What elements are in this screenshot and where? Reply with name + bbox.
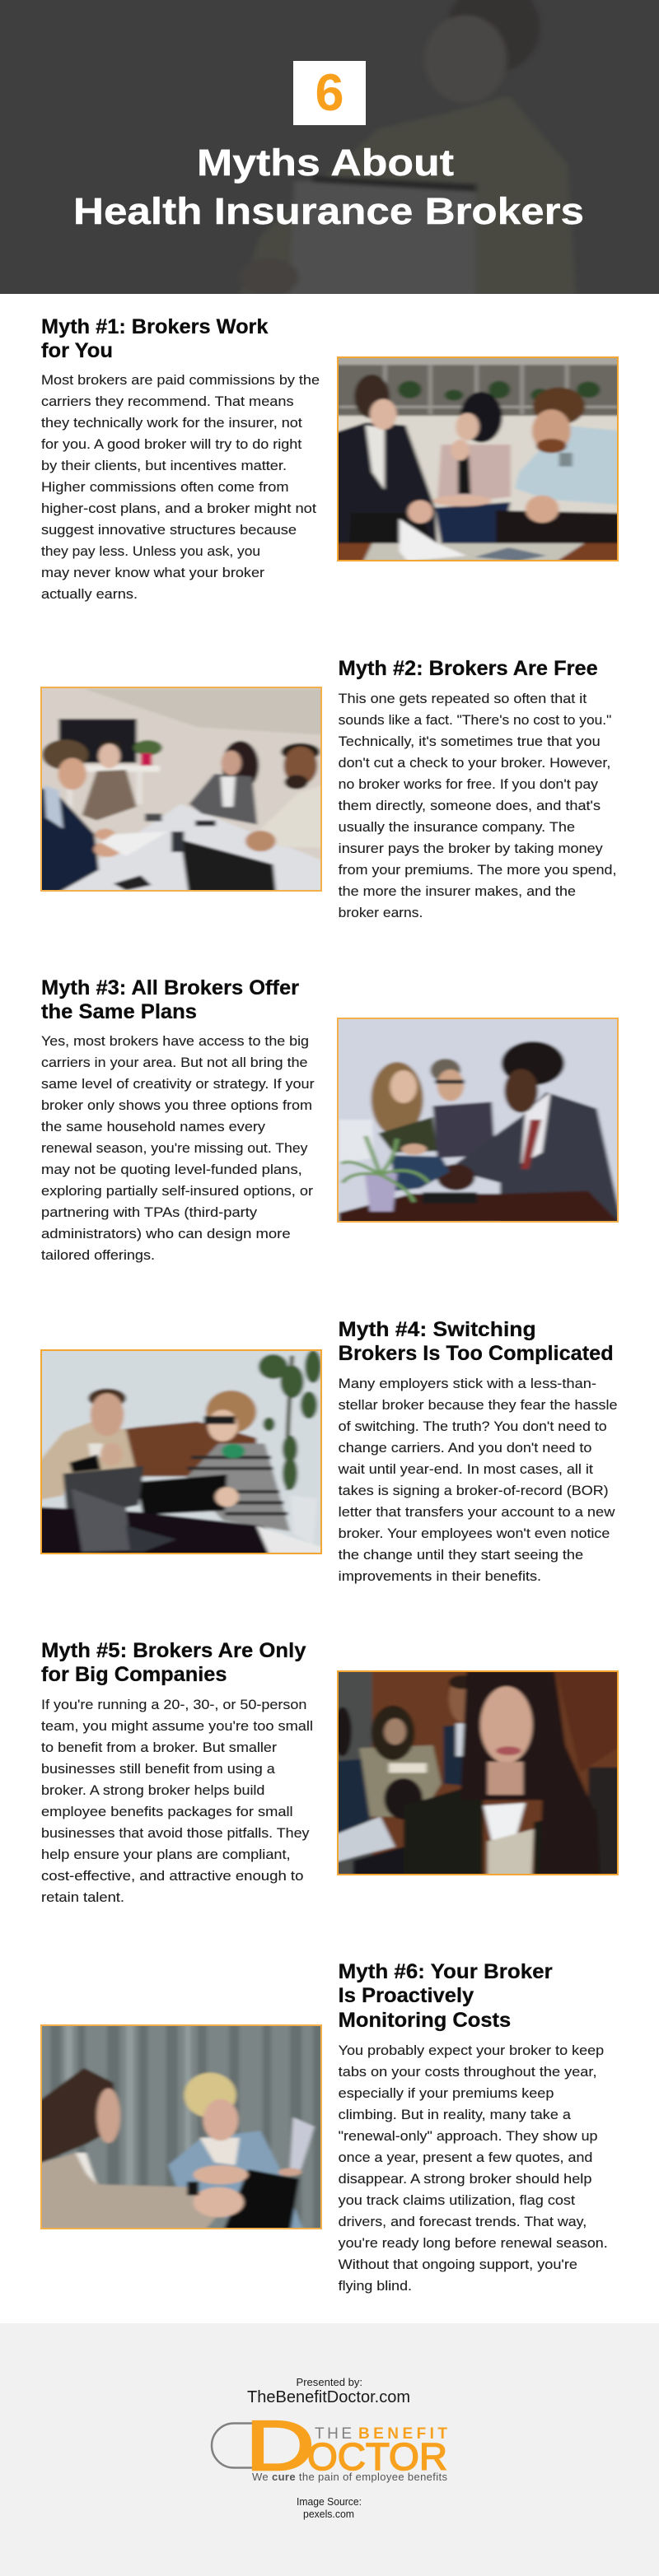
body text: myth 1: by their clients, but incentives matter. (41, 459, 287, 473)
body text: myth 5: cost-effective, and attractive enough to (41, 1869, 303, 1884)
man right (262, 787, 320, 847)
body text: myth 4 (338, 1377, 618, 1584)
photo: four people around a table (40, 687, 322, 892)
title: Myths About (197, 142, 454, 184)
body text: myth 6: You probably expect your broker to keep (339, 2043, 604, 2058)
body text: myth 2: don't cut a check to your broker. However, (339, 756, 610, 771)
brunette woman (34, 2153, 221, 2234)
photo border (338, 1018, 618, 1222)
body text: myth 3: the same household names every (41, 1120, 266, 1134)
photo border (41, 2025, 321, 2229)
footer (0, 2323, 659, 2576)
body text: myth 4: Many employers stick with a less-than- (339, 1377, 596, 1391)
title: Health Insurance Brokers (73, 190, 584, 232)
heading: myth 1: Myth #1: Brokers Work (41, 315, 269, 338)
body text: myth 3: Yes, most brokers have access to the big (41, 1034, 309, 1049)
body text: myth 5 (41, 1698, 313, 1905)
photo border (338, 357, 618, 561)
body text: myth 1: Most brokers are paid commissions by the (41, 373, 320, 388)
body text: myth 6 (339, 2043, 608, 2294)
body text: myth 4: broker. Your employees won't even notice (339, 1526, 610, 1541)
hands (194, 2165, 248, 2184)
body text: myth 4: takes is signing a broker-of-record (BOR) (339, 1484, 609, 1498)
body text: myth 1: for you. A good broker will try to do right (41, 437, 302, 452)
body text: myth 6: tabs on your costs throughout the year, (339, 2065, 596, 2080)
sofa woman left (332, 422, 437, 545)
paper (290, 2117, 315, 2175)
body text: myth 4: wait until year-end. In most cases, all it (338, 1462, 593, 1477)
body text: myth 3: partnering with TPAs (third-party (41, 1205, 258, 1220)
body text: myth 1: they pay less. Unless you ask, you (41, 544, 260, 559)
panel: myth 3 (41, 976, 630, 1263)
man (34, 1422, 137, 1501)
man with glasses (433, 1102, 495, 1158)
sofa woman middle (437, 445, 511, 505)
sofa man right (494, 509, 617, 545)
heading: myth 4: Brokers Is Too Complicated (339, 1342, 614, 1365)
body text: myth 1: Higher commissions often come from (41, 480, 288, 495)
body text: myth 4: change carriers. And you don't need to (339, 1441, 591, 1456)
body text: myth 5: employee benefits packages for small (41, 1805, 293, 1819)
body text: myth 1: carriers they recommend. That means (41, 394, 294, 409)
book and laptops (137, 1474, 227, 1515)
heading: myth 1: for You (41, 339, 113, 362)
photo: smiling woman in a group (337, 1670, 619, 1875)
body text: myth 6: disappear. A strong broker should help (339, 2172, 591, 2187)
body text: myth 1: they technically work for the insurer, not (41, 416, 302, 431)
logo big D: D (245, 2407, 315, 2485)
body text: myth 3: same level of creativity or strategy. If your (41, 1077, 315, 1092)
body text: myth 1: may never know what your broker (41, 566, 265, 580)
background people (359, 1745, 442, 1817)
body text: myth 6: you track claims utilization, flag cost (339, 2193, 575, 2208)
body text: myth 4: of switching. The truth? You don't need to (339, 1419, 607, 1434)
body text: myth 6: especially if your premiums keep (339, 2086, 554, 2101)
body text: myth 1: actually earns. (41, 587, 138, 602)
logo: The Benefit Doctor (212, 2407, 448, 2485)
image source: Image Source: (297, 2495, 362, 2508)
heading: myth 3: the Same Plans (41, 1000, 197, 1023)
panel: myth 4 (30, 1318, 618, 1584)
tablet and notebook (390, 1155, 450, 1191)
photo: adviser with a couple (337, 1018, 619, 1223)
body text: myth 6: you're ready long before renewal season. (339, 2236, 608, 2251)
logo pill outline (212, 2424, 252, 2468)
body text: myth 6: climbing. But in reality, many take a (339, 2108, 572, 2122)
body text: myth 2: sounds like a fact. "There's no cost to you." (339, 713, 611, 728)
heading: myth 5 (41, 1639, 306, 1686)
body text: myth 3: renewal season, you're missing out. They (41, 1141, 308, 1156)
body text: myth 2: Technically, it's sometimes true that you (339, 734, 601, 749)
body text: myth 2: This one gets repeated so often that it (339, 692, 587, 706)
image source (297, 2495, 362, 2520)
panel: myth 5 (41, 1639, 630, 1905)
body text: myth 6: Without that ongoing support, you're (339, 2257, 577, 2272)
photo: three people on a sofa (337, 356, 619, 561)
body text: myth 2: no broker works for free. If you don't pay (339, 777, 599, 792)
heading: myth 6 (339, 1960, 553, 2032)
body text: myth 1: higher-cost plans, and a broker might not (41, 501, 316, 516)
body text: myth 3: carriers in your area. But not all bring the (41, 1055, 308, 1070)
presented by: Presented by: (297, 2376, 362, 2388)
heading: myth 6: Myth #6: Your Broker (339, 1960, 553, 1983)
panel: myth 1 (41, 315, 630, 602)
photo border (41, 687, 321, 891)
table (63, 804, 320, 890)
body text: myth 5: businesses still benefit from using a (41, 1762, 276, 1777)
body text: myth 5: help ensure your plans are compliant, (41, 1847, 291, 1862)
body text: myth 6: once a year, present a few quotes, and (339, 2150, 592, 2165)
body text: myth 4: improvements in their benefits. (339, 1569, 541, 1584)
number badge: 6 (315, 64, 344, 122)
body text: myth 6: drivers, and forecast trends. That way, (339, 2215, 587, 2229)
body text: myth 3: broker only shows you three options from (41, 1098, 312, 1113)
woman centre (222, 741, 259, 790)
heading: myth 2: Myth #2: Brokers Are Free (339, 657, 598, 680)
sofa (100, 1422, 256, 1476)
logo tagline: We cure the pain of employee benefits (252, 2471, 448, 2483)
body text: myth 5: If you're running a 20-, 30-, or 50-person (41, 1698, 306, 1712)
coffee table and papers (339, 542, 617, 560)
logo BENEFIT: BENEFIT (358, 2425, 447, 2443)
body text: myth 4: stellar broker because they fear the hassle (339, 1398, 618, 1413)
main woman (404, 1782, 484, 1880)
heading: myth 5: for Big Companies (41, 1663, 227, 1686)
man left (42, 787, 100, 890)
website: TheBenefitDoctor.com (247, 2388, 410, 2406)
laptop and items (180, 840, 278, 890)
body text: myth 5: businesses that avoid those pitfalls. They (41, 1826, 310, 1841)
body text: myth 4: letter that transfers your account to a new (339, 1505, 615, 1520)
heading: myth 1 (41, 315, 269, 362)
body text: myth 2 (339, 692, 616, 920)
plant in purple pot (365, 1173, 397, 1212)
body text: myth 5: retain talent. (41, 1890, 124, 1905)
logo OCTOR: OCTOR (307, 2435, 447, 2478)
body text: myth 2: from your premiums. The more you spend, (339, 863, 616, 878)
woman (206, 1390, 256, 1433)
heading: myth 3: Myth #3: All Brokers Offer (41, 976, 299, 999)
body text: myth 2: them directly, someone does, and that's (339, 799, 601, 813)
body text: myth 3: exploring partially self-insured options, or (41, 1184, 314, 1199)
heading: myth 6: Monitoring Costs (339, 2009, 511, 2032)
body text: myth 2: the more the insurer makes, and the (339, 884, 576, 899)
heading: myth 3 (41, 976, 299, 1023)
heading: myth 4: Myth #4: Switching (339, 1318, 536, 1341)
body text: myth 6: flying blind. (339, 2279, 412, 2294)
body text: myth 5: broker. A strong broker helps build (41, 1783, 264, 1798)
folder (222, 2169, 299, 2234)
photo border (338, 1671, 618, 1875)
title (73, 142, 584, 232)
header background photo (0, 0, 659, 296)
body text: myth 2: insurer pays the broker by taking money (339, 841, 604, 856)
body text: myth 4: the change until they start seeing the (339, 1548, 583, 1563)
adviser (456, 1092, 622, 1224)
body text: myth 1: suggest innovative structures because (41, 523, 297, 538)
number badge (293, 61, 366, 125)
footer background (0, 2323, 659, 2576)
woman (372, 1062, 423, 1136)
body text: myth 6: "renewal-only" approach. They show up (339, 2129, 598, 2144)
header banner (0, 0, 659, 296)
woman left (82, 770, 137, 821)
heading: myth 4 (339, 1318, 614, 1365)
body text: myth 2: broker earns. (339, 906, 423, 920)
heading: myth 5: Myth #5: Brokers Are Only (41, 1639, 306, 1662)
body text: myth 2: usually the insurance company. The (339, 820, 575, 835)
logo THE: THE (315, 2425, 352, 2443)
photo border (41, 1350, 321, 1554)
panel: myth 2 (30, 657, 617, 920)
plant (287, 1356, 292, 1490)
body text: myth 3: administrators) who can design more (41, 1227, 291, 1241)
body text: myth 3: tailored offerings. (41, 1248, 155, 1263)
blonde woman (168, 2131, 305, 2234)
body text: myth 1 (41, 373, 320, 602)
body text: myth 5: to benefit from a broker. But smaller (41, 1740, 278, 1755)
panel: myth 6 (30, 1960, 608, 2294)
photo: two colleagues with laptops (40, 1349, 322, 1554)
body text: myth 5: team, you might assume you're too small (41, 1719, 313, 1734)
photo: two women reviewing documents (40, 2024, 322, 2229)
image source: pexels.com (303, 2508, 354, 2520)
body text: myth 3 (41, 1034, 315, 1263)
body text: myth 3: may not be quoting level-funded plans, (41, 1162, 302, 1177)
heading: myth 6: Is Proactively (339, 1984, 474, 2007)
table (339, 1191, 618, 1224)
